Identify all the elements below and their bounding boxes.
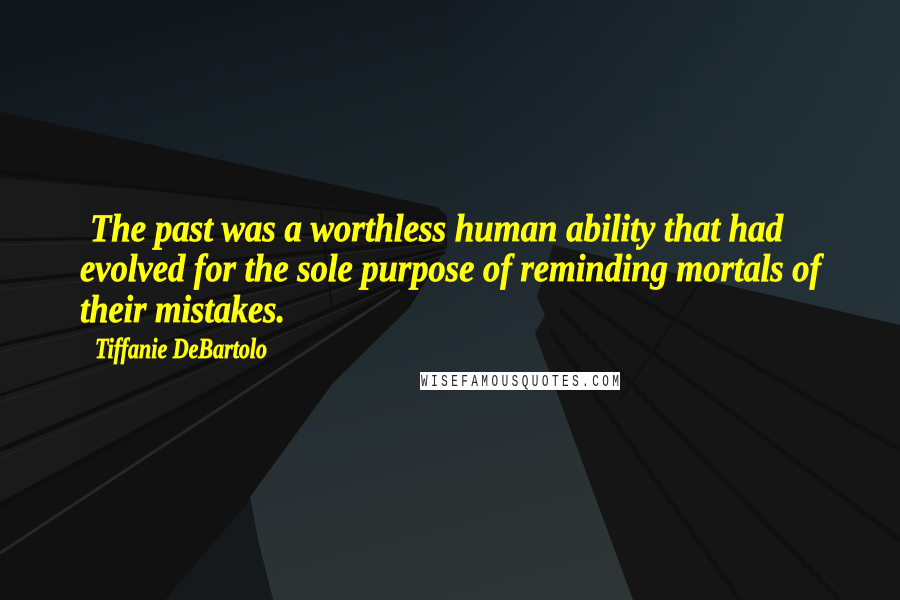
quote text [80,207,825,331]
quote text: evolved for the sole purpose of reminding mortals of [80,247,825,290]
quote text: The past was a worthless human ability that had [90,207,783,250]
author attribution: Tiffanie DeBartolo [95,333,267,365]
quote text: their mistakes. [80,288,285,331]
right skyscraper [535,245,900,600]
watermark badge: WISEFAMOUSQUOTES.COM [421,373,619,392]
left skyscraper [0,112,447,600]
